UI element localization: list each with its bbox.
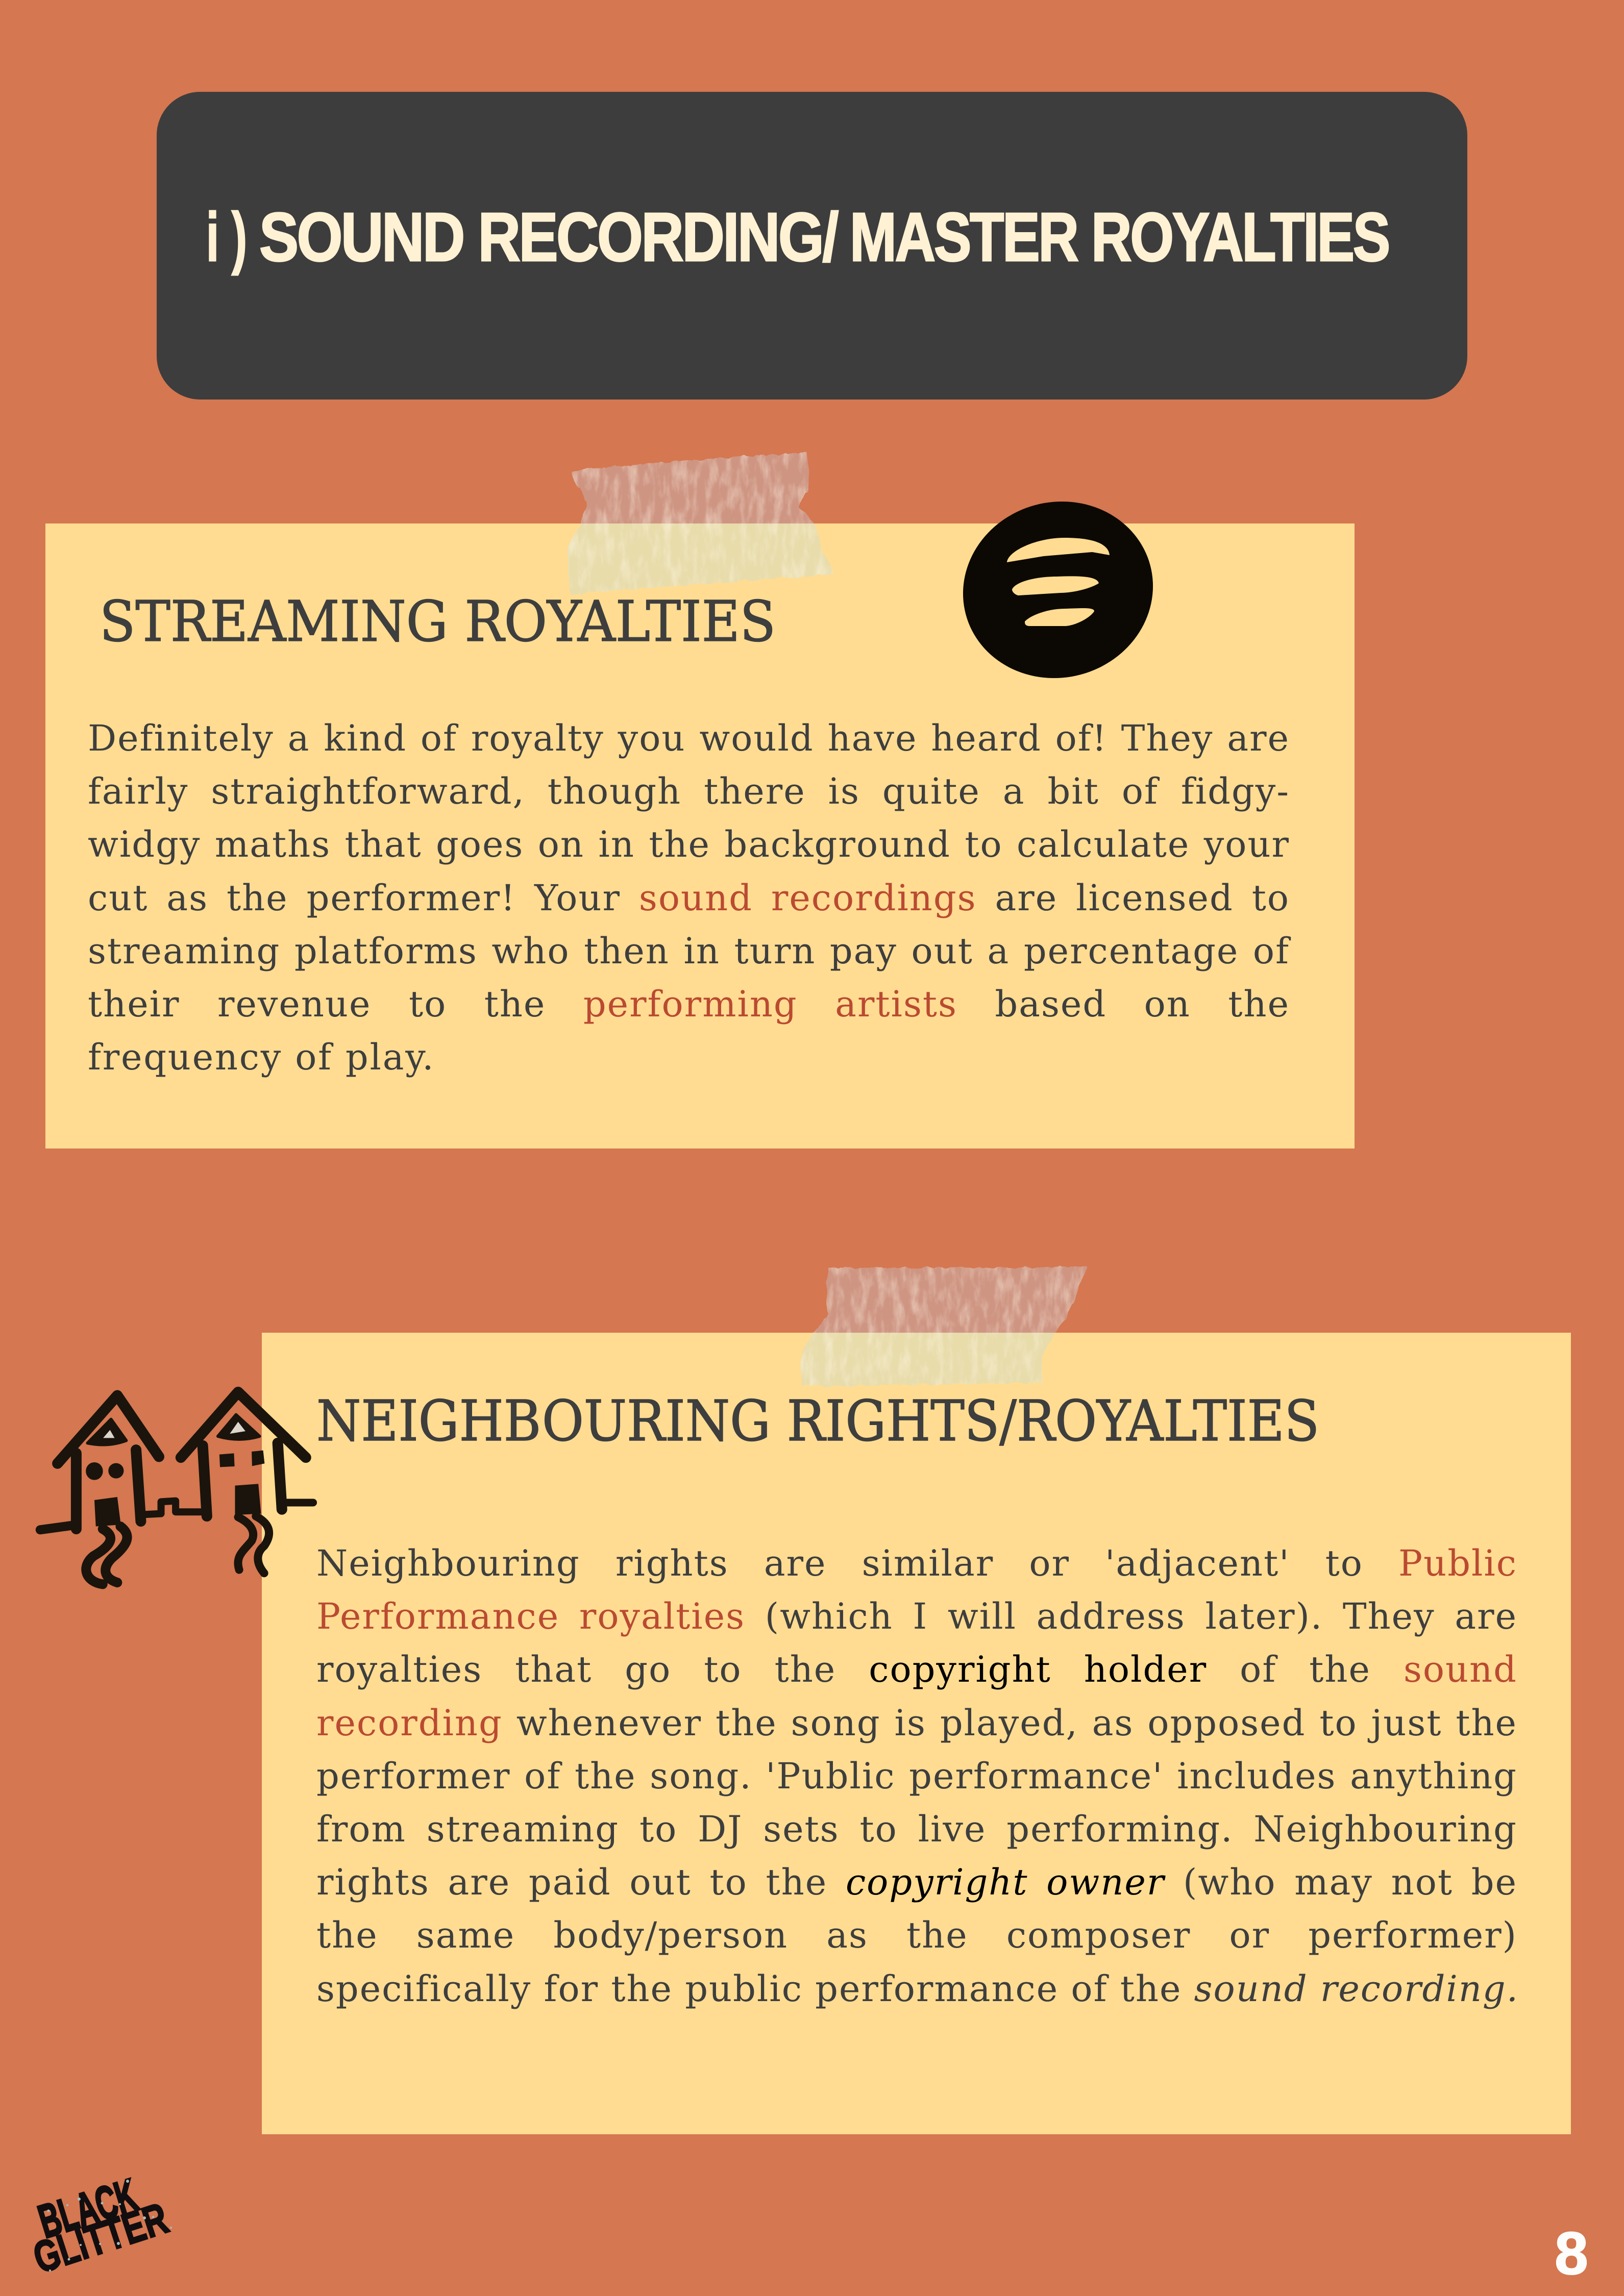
text block: streaming royalties body: widgy maths that goes on in the background to calculate your	[88, 823, 1290, 865]
icon: spotify logo	[943, 480, 1173, 700]
tape and icon layer	[34, 452, 1587, 2275]
panel: neighbouring rights	[262, 1333, 1571, 2134]
heading: streaming royalties: STREAMING ROYALTIES	[100, 589, 776, 654]
text block: neighbouring rights body	[316, 1542, 1519, 2010]
title: SOUND RECORDING/	[259, 198, 839, 276]
tape: streaming panel	[568, 452, 834, 594]
title: MASTER ROYALTIES	[850, 198, 1389, 276]
text block: neighbouring rights body: royalties that go to the copyright holder of the sound	[316, 1649, 1517, 1690]
logo: black glitter: BLACK	[33, 2169, 143, 2248]
text block: neighbouring rights body: Neighbouring rights are similar or 'adjacent' to Public	[316, 1542, 1517, 1584]
text block: neighbouring rights body: Performance royalties (which I will address later). They are	[316, 1595, 1517, 1637]
text block: streaming royalties body: their revenue to the performing artists based on the	[88, 983, 1290, 1025]
text block: streaming royalties body: Definitely a kind of royalty you would have heard of! They are	[88, 717, 1290, 759]
text block: neighbouring rights body: the same body/person as the composer or performer)	[316, 1914, 1517, 1956]
text block: neighbouring rights body: from streaming to DJ sets to live performing. Neighbouring	[316, 1808, 1517, 1850]
title: i )	[206, 198, 247, 276]
text block: neighbouring rights body: recording whenever the song is played, as opposed to just the	[316, 1702, 1517, 1744]
text block: neighbouring rights body: rights are paid out to the copyright owner (who may not be	[316, 1861, 1517, 1903]
logo: black glitter: GLITTER	[28, 2193, 174, 2283]
text block: streaming royalties body: fairly straightforward, though there is quite a bit of fidgy-	[88, 770, 1290, 812]
title	[206, 198, 1389, 276]
text block: streaming royalties body: streaming platforms who then in turn pay out a percentage of	[88, 930, 1290, 972]
heading: neighbouring rights: NEIGHBOURING RIGHTS/ROYALTIES	[316, 1388, 1319, 1454]
text block: streaming royalties body: frequency of play.	[88, 1036, 435, 1078]
text block: neighbouring rights body: specifically for the public performance of the sound recording.	[316, 1968, 1519, 2010]
icon: two walking houses	[40, 1392, 313, 1584]
panel: streaming royalties	[45, 523, 1355, 1149]
tape: neighbouring panel	[801, 1267, 1087, 1386]
text block: neighbouring rights body: performer of the song. 'Public performance' includes anything	[316, 1755, 1517, 1797]
page number: 8	[1555, 2220, 1588, 2287]
title banner	[157, 92, 1467, 400]
text block: streaming royalties body: cut as the performer! Your sound recordings are licensed to	[88, 877, 1290, 919]
text block: streaming royalties body	[88, 717, 1291, 1078]
